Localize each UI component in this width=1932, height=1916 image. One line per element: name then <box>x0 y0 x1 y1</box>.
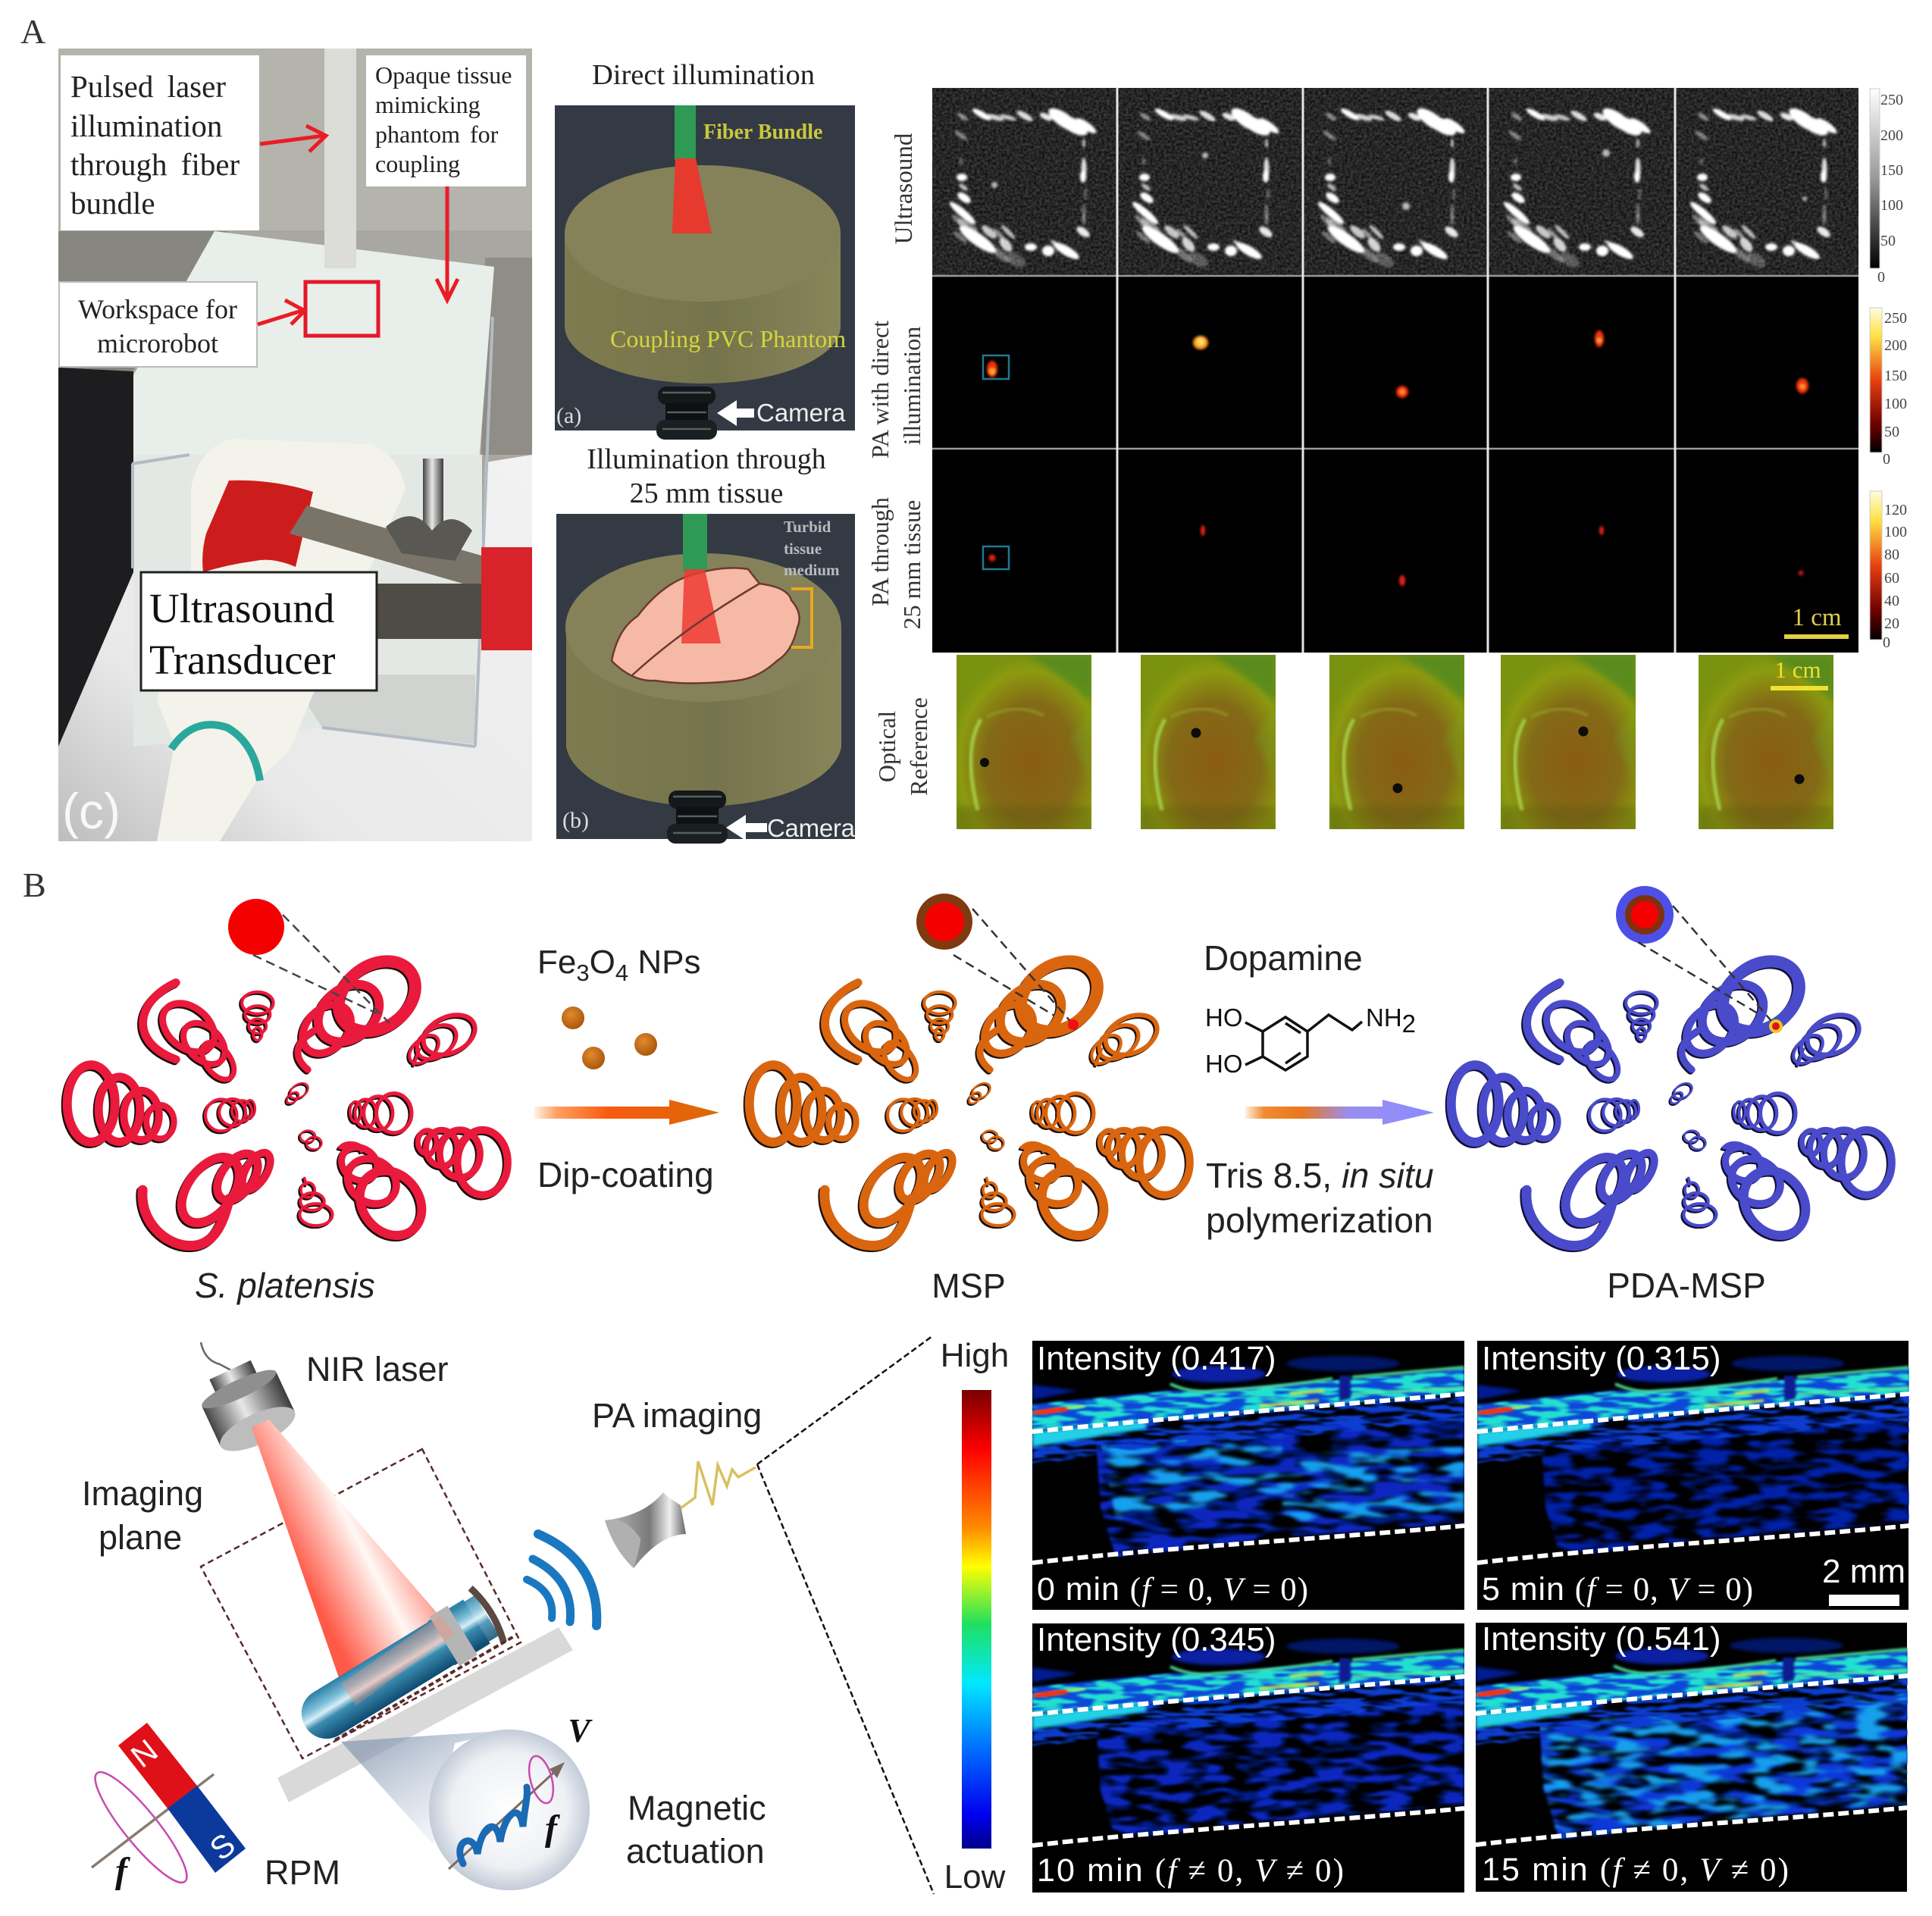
schematic labels: actuation <box>626 1832 765 1871</box>
schematic labels: PA imaging <box>592 1396 762 1435</box>
zoom dashed lines <box>757 1336 934 1894</box>
PA panel 0 min: 0 min (f = 0, V = 0) <box>1037 1571 1308 1608</box>
molecule: dopamine <box>1205 1003 1416 1078</box>
row: ultrasound images <box>932 88 1858 276</box>
imaging plane and platform <box>201 1449 573 1802</box>
diagram (a) direct illumination <box>555 105 855 440</box>
scale bar 1 cm <box>1771 656 1828 690</box>
colorbar: PA tissue: 20 <box>1884 615 1899 632</box>
magnet: f <box>115 1851 130 1891</box>
clamp <box>290 459 532 650</box>
PA panel 5 min: 5 min (f = 0, V = 0) <box>1482 1571 1753 1608</box>
diagram (b) through tissue: Turbid <box>784 518 831 536</box>
label: dip-coating: Dip-coating <box>537 1155 714 1194</box>
zoom cone <box>341 1730 509 1845</box>
row labels: PA through <box>866 497 894 606</box>
PA panel 0 min <box>1032 1340 1464 1610</box>
row labels <box>866 133 932 796</box>
diagram (a) direct illumination: Fiber Bundle <box>703 121 822 144</box>
PA panel 15 min: Intensity (0.541) <box>1482 1620 1721 1658</box>
laser beam <box>252 1420 440 1684</box>
colorbar: PA direct: 50 <box>1884 424 1899 440</box>
color scale <box>941 1337 1009 1896</box>
magnified helix circle <box>429 1712 593 1890</box>
signal zigzag <box>681 1461 756 1508</box>
schematic labels: NIR laser <box>306 1350 449 1388</box>
label: opaque phantom: mimicking <box>375 91 481 118</box>
red arrows <box>258 126 458 324</box>
label: opaque phantom: Opaque tissue <box>375 61 512 89</box>
diagram (b) through tissue: Camera <box>767 814 856 842</box>
schematic labels: RPM <box>265 1853 340 1892</box>
helix group: PDA-MSP <box>1450 886 1892 1248</box>
colorbar: PA direct: 200 <box>1884 337 1907 354</box>
colorbar: PA direct: 0 <box>1883 451 1890 468</box>
labels under helices: S. platensis <box>195 1266 375 1305</box>
colorbar: PA direct: 100 <box>1884 396 1907 412</box>
row: PA through tissue <box>932 449 1858 653</box>
PA panel 5 min <box>1477 1340 1909 1610</box>
molecule: dopamine: 2 <box>1402 1010 1416 1038</box>
signal waves <box>527 1534 597 1626</box>
colorbar: ultrasound: 50 <box>1880 233 1896 249</box>
teal ring <box>171 725 260 781</box>
colorbar: PA tissue <box>1870 491 1907 651</box>
colorbar: ultrasound: 250 <box>1880 92 1903 108</box>
label: fiber bundle: Pulsed laser <box>70 69 226 104</box>
helix group: S. platensis <box>66 899 508 1248</box>
magnified helix circle: V <box>568 1712 593 1749</box>
colorbar: PA tissue: 120 <box>1884 502 1907 518</box>
PA panel 15 min <box>1476 1620 1908 1892</box>
PA panel 0 min: Intensity (0.417) <box>1037 1340 1276 1377</box>
PA panel 10 min: Intensity (0.345) <box>1037 1621 1276 1658</box>
Fe3O4 label: 3 <box>576 960 590 986</box>
PA panel 5 min: Intensity (0.315) <box>1482 1340 1721 1377</box>
colorbar: ultrasound: 150 <box>1880 162 1903 179</box>
red cap <box>202 481 313 572</box>
row labels: Optical <box>873 711 900 782</box>
colorbar: PA direct: 250 <box>1884 310 1907 327</box>
diagram (b) through tissue <box>556 514 856 844</box>
tag (c): (c) <box>62 783 121 839</box>
label: tris: polymerization <box>1206 1201 1433 1240</box>
arrow: dip-coating <box>534 1100 719 1125</box>
scale bar 1 cm <box>1784 604 1849 639</box>
diagram (b) through tissue: tissue <box>784 540 822 558</box>
colorbar: ultrasound: 200 <box>1880 127 1903 144</box>
Fe3O4 label: Fe <box>537 944 576 981</box>
Fe3O4 label: NPs <box>628 944 700 981</box>
row labels: Reference <box>905 697 932 796</box>
colorbar: PA direct <box>1870 308 1907 468</box>
colorbar: PA direct: 150 <box>1884 368 1907 384</box>
title: illumination through tissue: Illumination through <box>587 443 826 475</box>
schematic labels: Imaging <box>82 1474 203 1513</box>
receiver transducer <box>605 1492 686 1568</box>
labels under helices <box>195 1266 1766 1305</box>
label: opaque phantom: phantom for <box>375 121 499 148</box>
colorbar: PA tissue: 40 <box>1884 593 1899 609</box>
colorbar: ultrasound: 100 <box>1880 197 1903 214</box>
row labels: Ultrasound <box>891 133 918 244</box>
diagram (a) direct illumination: Coupling PVC Phantom <box>610 325 846 352</box>
magnet: N <box>124 1733 164 1774</box>
row labels: PA with direct <box>866 321 894 459</box>
label: opaque phantom <box>366 55 526 186</box>
molecule: dopamine: HO <box>1205 1003 1243 1032</box>
label: ultrasound transducer: Ultrasound <box>149 585 334 631</box>
PA panel 10 min: 10 min (f ≠ 0, V ≠ 0) <box>1037 1852 1344 1889</box>
laser head <box>193 1342 301 1460</box>
scale bar 2 mm: 2 mm <box>1822 1553 1905 1590</box>
labels under helices: MSP <box>932 1266 1006 1305</box>
magnet: S <box>203 1826 242 1867</box>
Fe3O4 label: O <box>590 944 615 981</box>
magnified helix circle: f <box>545 1808 560 1849</box>
label: workspace <box>59 282 257 367</box>
panel: experimental setup photo <box>58 49 532 841</box>
label: fiber bundle: bundle <box>70 186 155 221</box>
PA panel 10 min <box>1032 1621 1464 1893</box>
label: opaque phantom: coupling <box>375 150 460 177</box>
colorbar: PA tissue: 0 <box>1883 634 1890 651</box>
panel letter B: B <box>23 866 46 904</box>
diagram (a) direct illumination: (a) <box>556 403 581 428</box>
scale bar 1 cm: 1 cm <box>1774 656 1821 683</box>
title: direct illumination: Direct illumination <box>592 59 815 91</box>
colorbar: PA tissue: 60 <box>1884 570 1899 587</box>
schematic labels <box>82 1350 766 1892</box>
label: fiber bundle <box>61 55 259 230</box>
color scale: High <box>941 1337 1009 1374</box>
label: fiber bundle: illumination <box>70 108 222 143</box>
label: workspace: Workspace for <box>78 294 237 324</box>
ultrasound transducer body <box>157 439 406 841</box>
magnet <box>84 1723 246 1892</box>
setup schematic <box>82 1336 934 1894</box>
label: dopamine: Dopamine <box>1204 938 1363 978</box>
panel letter A: A <box>20 12 45 51</box>
colorbar: ultrasound: 0 <box>1877 269 1885 286</box>
row: PA direct illumination <box>932 276 1858 449</box>
diagram (b) through tissue: (b) <box>562 808 589 833</box>
colorbar: PA tissue: 100 <box>1884 524 1907 540</box>
panel B <box>23 866 1909 1896</box>
label: tris: Tris 8.5, in situ <box>1206 1156 1434 1195</box>
tissue <box>612 568 800 684</box>
label: ultrasound transducer <box>141 572 377 690</box>
panel A <box>20 12 1907 844</box>
chart: imaging grid <box>932 88 1858 653</box>
optical reference images <box>957 655 1833 833</box>
label: fiber bundle: through fiber <box>70 147 240 182</box>
diagram (a) direct illumination: Camera <box>756 399 846 427</box>
helix group: MSP <box>748 894 1190 1248</box>
schematic labels: Magnetic <box>628 1789 766 1827</box>
colorbar: ultrasound <box>1870 89 1903 286</box>
scale bar 1 cm: 1 cm <box>1792 604 1842 631</box>
molecule: dopamine: HO <box>1205 1050 1243 1078</box>
PA panel 15 min: 15 min (f ≠ 0, V ≠ 0) <box>1482 1852 1789 1888</box>
workspace red box <box>305 282 378 336</box>
Fe3O4 nanoparticles <box>562 1007 657 1069</box>
diagram (b) through tissue: medium <box>784 561 840 579</box>
color scale: Low <box>944 1858 1006 1896</box>
colorbar: PA tissue: 80 <box>1884 546 1899 563</box>
Fe3O4 label: 4 <box>615 960 628 986</box>
sample tube <box>289 1586 515 1754</box>
labels under helices: PDA-MSP <box>1607 1266 1766 1305</box>
row labels: 25 mm tissue <box>898 500 925 629</box>
title: illumination through tissue: 25 mm tissue <box>630 477 783 509</box>
label: workspace: microrobot <box>97 328 218 358</box>
schematic labels: plane <box>99 1518 182 1557</box>
row labels: illumination <box>898 327 925 445</box>
label: ultrasound transducer: Transducer <box>149 637 335 683</box>
molecule: dopamine: NH <box>1366 1003 1402 1032</box>
arrow: polymerization <box>1245 1100 1434 1125</box>
